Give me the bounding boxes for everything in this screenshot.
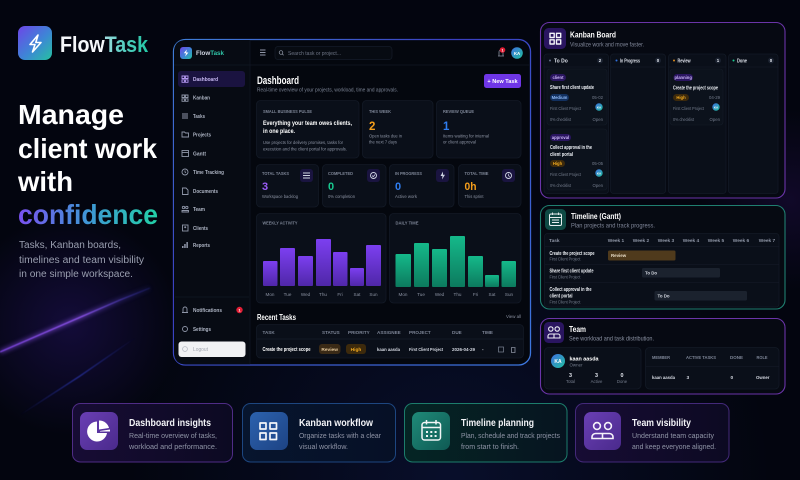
nav item: Notifications: 1: [238, 308, 241, 312]
task card: share first client update: 05-02: [592, 95, 604, 100]
new task button: + New Task: [487, 79, 518, 85]
gantt table: Week 5: [708, 238, 725, 244]
member table: Owner: [756, 375, 770, 381]
logout button: Logout: [193, 347, 208, 353]
recent tasks heading: View all: [506, 314, 521, 319]
recent tasks heading: Recent Tasks: [257, 313, 296, 322]
nav item: Dashboard (active): Dashboard: [193, 77, 218, 83]
tagline: timelines and team visibility: [19, 255, 144, 266]
member table: ACTIVE TASKS: [686, 355, 716, 360]
gantt row: collect approval: client portal: [550, 294, 573, 300]
timeline heading: Plan projects and track progress.: [571, 224, 655, 230]
task card: collect approval: approval: [552, 135, 569, 140]
member table: ROLE: [756, 355, 768, 360]
stat: total time: This sprint: [464, 194, 484, 199]
stat: total time: 0h: [464, 181, 477, 193]
task card: collect approval: client portal: [550, 152, 573, 158]
search box: Search task or project...: [288, 51, 341, 57]
recent tasks table: TASK: [262, 330, 275, 335]
column: Review: [668, 54, 726, 194]
task card: collect approval: 05-05: [592, 161, 604, 166]
stat: total time: [458, 164, 521, 207]
recent tasks table: High: [351, 347, 361, 353]
member table: DONE: [730, 355, 743, 360]
feature card: team visibility: Team visibility: [632, 417, 691, 429]
gantt row: share first client update: To Do: [645, 270, 657, 276]
nav item: Clients: Clients: [193, 226, 208, 232]
logout button: [178, 342, 246, 357]
brand name: FlowTask: [60, 32, 149, 57]
recent tasks table: [256, 324, 524, 358]
card: review queue: REVIEW QUEUE: [443, 109, 474, 114]
stat: completed: COMPLETED: [328, 171, 354, 176]
page heading: [257, 75, 398, 94]
user avatar: [511, 47, 523, 59]
sidebar logo: FlowTask: [196, 50, 224, 57]
feature card: team visibility: [576, 404, 729, 462]
chart: weekly activity: WEEKLY ACTIVITY: [262, 220, 298, 226]
gantt table: Week 7: [759, 238, 776, 244]
recent tasks table: Review: [321, 347, 338, 353]
task card: share first client update: First Client Project: [550, 106, 582, 111]
kanban heading: [570, 30, 644, 48]
panel: team: [540, 318, 785, 394]
recent tasks table: -: [482, 348, 484, 353]
chart: daily time: Mon: [399, 292, 408, 297]
column: To Do: 2: [599, 58, 602, 63]
gantt row: collect approval: To Do: [658, 294, 670, 298]
headline: confidence: [18, 199, 158, 230]
icon: menu: [260, 50, 266, 55]
chart: weekly activity: Fri: [337, 292, 343, 297]
icon: kanban: [544, 28, 566, 49]
nav item: Tasks: [182, 114, 205, 120]
new task button: [484, 74, 521, 88]
card: small business pulse: execution and the client portal for approvals.: [263, 146, 347, 152]
task card: create the project scope: KA: [714, 106, 719, 110]
member table: kaan aasda: [652, 375, 675, 381]
headline: Manage: [18, 99, 124, 130]
icon: team: [544, 322, 564, 343]
task card: share first client update: Medium: [552, 95, 568, 100]
chart: daily time: Fri: [473, 292, 478, 297]
member card: Owner: [570, 362, 583, 368]
card: this week: THIS WEEK: [369, 109, 392, 114]
task card: collect approval: First Client Project: [550, 172, 582, 177]
gantt row: create the project scope: First Client Project: [550, 256, 581, 262]
column: Done: Done: [737, 58, 747, 64]
nav item: Tasks: Tasks: [193, 114, 205, 120]
gantt row: create the project scope: Create the project scope: [550, 251, 595, 257]
team heading: See workload and task distribution.: [569, 336, 654, 342]
chart: daily time: Sat: [489, 292, 496, 297]
tagline: Tasks, Kanban boards,: [19, 240, 121, 251]
stat: total tasks: TOTAL TASKS: [262, 171, 289, 176]
card: this week: Open tasks due in: [369, 134, 402, 138]
page heading: Real-time overview of your projects, workload, time and approvals.: [257, 88, 398, 94]
task card: collect approval: High: [553, 161, 563, 166]
task card: create the project scope: First Client Project: [673, 106, 705, 111]
nav item: Reports: [182, 242, 210, 249]
feature card: dashboard insights: Real-time overview of tasks,: [129, 431, 217, 440]
gantt row: create the project scope: Review: [611, 253, 627, 258]
task card: share first client update: Share first client update: [550, 85, 594, 91]
icon: calendar: [545, 209, 566, 230]
recent tasks heading: [257, 313, 521, 322]
stat: in progress: 0: [395, 181, 401, 193]
stat: total tasks: 3: [262, 181, 268, 193]
recent tasks table: PRIORITY: [348, 330, 370, 335]
stat: total tasks: Workspace backlog: [262, 194, 298, 199]
stat: total tasks: [256, 164, 318, 207]
chart: weekly activity: Sat: [354, 292, 361, 297]
card: this week: 2: [369, 121, 375, 133]
member table: 0: [730, 375, 734, 381]
column: Done: 0: [770, 58, 773, 63]
feature card: timeline planning: [404, 404, 567, 462]
feature card: team visibility: Understand team capacity: [632, 431, 714, 440]
card: this week: the next 7 days: [369, 140, 398, 144]
task card: share first client update: [547, 69, 607, 125]
tagline: in one simple workspace.: [19, 269, 133, 280]
feature card: timeline planning: Plan, schedule and track projects: [461, 431, 560, 440]
gantt table: Task: [549, 238, 560, 244]
recent tasks table: kaan aasda: [377, 347, 400, 353]
feature card: timeline planning: from start to finish.: [461, 442, 519, 451]
task card: create the project scope: planning: [674, 75, 692, 80]
card: review queue: Items waiting for internal: [443, 134, 489, 138]
member card: Done: [617, 379, 628, 384]
gantt row: share first client update: Share first client update: [550, 268, 594, 274]
task card: collect approval: Open: [592, 183, 604, 188]
stat: in progress: [390, 164, 454, 207]
feature card: dashboard insights: [72, 404, 232, 462]
page heading: Dashboard: [257, 75, 299, 87]
nav item: Clients: [182, 225, 208, 232]
recent tasks table: STATUS: [322, 330, 340, 335]
task card: collect approval: Collect approval in the: [550, 145, 592, 151]
task card: create the project scope: Create the project scope: [673, 86, 718, 92]
icon: logo bolt: [18, 26, 52, 60]
task card: share first client update: KA: [597, 106, 602, 110]
nav item: Team: Team: [193, 207, 205, 213]
task card: create the project scope: [670, 69, 723, 125]
gantt row: collect approval: First Client Project: [550, 300, 581, 304]
gantt row: collect approval: [550, 287, 747, 304]
nav item: Team: [182, 206, 205, 213]
member card: 3: [595, 373, 598, 379]
nav item: Notifications: [182, 307, 243, 314]
task card: create the project scope: High: [676, 95, 686, 100]
gantt table: Week 6: [733, 238, 750, 244]
member card: Total: [566, 379, 575, 384]
gantt row: create the project scope: [550, 250, 676, 262]
recent tasks table: 2026-04-29: [452, 347, 475, 353]
nav item: Settings: [182, 326, 211, 333]
headline: with: [17, 166, 73, 197]
notification bell: 1: [501, 48, 504, 52]
nav item: Kanban: [182, 95, 210, 102]
search box: [275, 46, 392, 60]
task card: create the project scope: Open: [709, 117, 721, 122]
recent tasks table: PROJECT: [409, 330, 431, 335]
column: Review: 1: [717, 58, 720, 63]
feature card: dashboard insights: Dashboard insights: [129, 417, 211, 429]
column: In Progress: In Progress: [620, 58, 640, 64]
stat: completed: 0: [328, 181, 334, 193]
task card: create the project scope: 04-29: [709, 95, 721, 100]
task card: share first client update: Open: [592, 117, 604, 122]
task card: collect approval: KA: [597, 172, 602, 176]
gantt table: Week 4: [683, 238, 700, 244]
card: small business pulse: Use projects for delivery promises, tasks for: [263, 140, 343, 145]
member card: Active: [591, 379, 603, 384]
panel: kanban board: [540, 22, 785, 198]
panel: dashboard app: [174, 40, 530, 365]
gantt row: collect approval: Collect approval in the: [550, 287, 592, 293]
column: Done: [728, 54, 778, 194]
feature card: kanban workflow: Organize tasks with a clear: [299, 431, 381, 440]
sidebar logo: [180, 47, 224, 59]
chart: weekly activity: Mon: [266, 292, 275, 297]
stat: in progress: Active work: [395, 194, 418, 199]
team heading: [569, 325, 654, 342]
feature card: team visibility: and keep everyone aligned.: [632, 442, 716, 451]
tagline: [19, 240, 144, 280]
chart: weekly activity: Thu: [319, 292, 327, 297]
headline: client work: [18, 133, 157, 164]
nav item: Dashboard (active): [178, 71, 245, 87]
feature card: dashboard insights: workload and performance.: [128, 442, 217, 451]
topbar: [260, 46, 523, 60]
timeline heading: Timeline (Gantt): [571, 211, 621, 221]
logo: FlowTask: [18, 26, 149, 60]
chart: weekly activity: Wed: [301, 292, 311, 297]
headline: [17, 99, 158, 230]
task card: collect approval: [547, 129, 607, 190]
user avatar: KA: [514, 51, 521, 56]
recent tasks table: ASSIGNEE: [377, 330, 401, 335]
nav item: Projects: Projects: [193, 132, 211, 138]
icon: calendar: [412, 412, 450, 450]
chart: weekly activity: Tue: [284, 292, 292, 297]
panel: timeline gantt: [540, 206, 785, 309]
nav item: Settings: Settings: [193, 327, 211, 333]
task card: create the project scope: 0% checklist: [673, 117, 695, 122]
card: review queue: [436, 100, 521, 158]
member table: MEMBER: [652, 355, 671, 360]
task card: share first client update: 0% checklist: [550, 117, 572, 122]
icon: kanban grid: [250, 412, 288, 450]
stat: total time: TOTAL TIME: [464, 171, 488, 176]
nav item: Notifications: Notifications: [193, 308, 222, 314]
member card: 0: [620, 373, 624, 379]
chart: daily time: Thu: [454, 292, 462, 297]
feature card: kanban workflow: [242, 404, 396, 462]
member table: 3: [686, 375, 690, 381]
chart: weekly activity: [256, 214, 386, 303]
nav item: Kanban: Kanban: [193, 96, 210, 102]
nav item: Reports: Reports: [193, 243, 210, 249]
chart: daily time: Wed: [435, 292, 445, 297]
stat: completed: [322, 164, 386, 207]
icon: pie chart: [80, 412, 118, 450]
card: review queue: or client approval: [443, 140, 476, 144]
nav item: Gantt: Gantt: [193, 152, 206, 158]
recent tasks table: First Client Project: [409, 347, 443, 353]
gantt row: share first client update: [550, 268, 720, 280]
gantt table: Week 1: [608, 238, 625, 244]
chart: daily time: DAILY TIME: [396, 220, 418, 226]
feature card: kanban workflow: visual workflow.: [299, 442, 348, 451]
column: In Progress: 0: [657, 58, 660, 63]
kanban heading: Kanban Board: [570, 30, 616, 40]
chart: daily time: [390, 214, 521, 303]
card: small business pulse: Everything your team owes clients,: [263, 121, 352, 127]
card: small business pulse: SMALL BUSINESS PULSE: [263, 109, 312, 114]
timeline heading: [571, 211, 655, 230]
chart: weekly activity: Sun: [369, 292, 378, 297]
column: To Do: [544, 54, 608, 194]
nav item: Projects: [182, 132, 211, 138]
gantt row: share first client update: First Client Project: [550, 274, 581, 280]
nav item: Gantt: [182, 150, 206, 158]
member card: 3: [569, 373, 572, 379]
member card: [544, 348, 641, 389]
gantt table: Week 2: [633, 238, 650, 244]
kanban heading: Visualize work and move faster.: [570, 42, 644, 48]
chart: daily time: Sun: [505, 292, 514, 297]
team heading: Team: [569, 325, 586, 334]
member card: KA: [554, 359, 562, 365]
card: small business pulse: in one place.: [263, 129, 295, 135]
recent tasks table: DUE: [452, 330, 462, 335]
feature card: kanban workflow: Kanban workflow: [299, 417, 374, 429]
sidebar: [174, 40, 530, 364]
stat: completed: 0% completion: [328, 194, 355, 199]
task card: collect approval: 0% checklist: [550, 183, 572, 188]
feature card: timeline planning: Timeline planning: [461, 417, 534, 429]
task card: share first client update: client: [553, 75, 564, 80]
nav item: Time Tracking: Time Tracking: [193, 170, 224, 176]
column: To Do: To Do: [554, 58, 568, 64]
gantt table: Week 3: [658, 238, 675, 244]
notification bell: [498, 47, 505, 56]
icon: team: [584, 412, 621, 450]
recent tasks table: TIME: [482, 330, 493, 335]
nav item: Documents: Documents: [193, 189, 218, 195]
nav item: Documents: [182, 188, 218, 195]
nav item: Time Tracking: [182, 169, 224, 176]
column: In Progress: [610, 54, 666, 194]
member table: [646, 348, 779, 389]
card: review queue: 1: [443, 121, 450, 133]
member card: kaan aasda: [570, 356, 599, 362]
column: Review: Review: [678, 58, 691, 64]
stat: in progress: IN PROGRESS: [395, 171, 422, 176]
card: this week: [362, 100, 433, 158]
chart: daily time: Tue: [417, 292, 425, 297]
card: small business pulse: [256, 100, 359, 158]
gantt table: [544, 234, 779, 307]
recent tasks table: Create the project scope: [262, 347, 311, 353]
